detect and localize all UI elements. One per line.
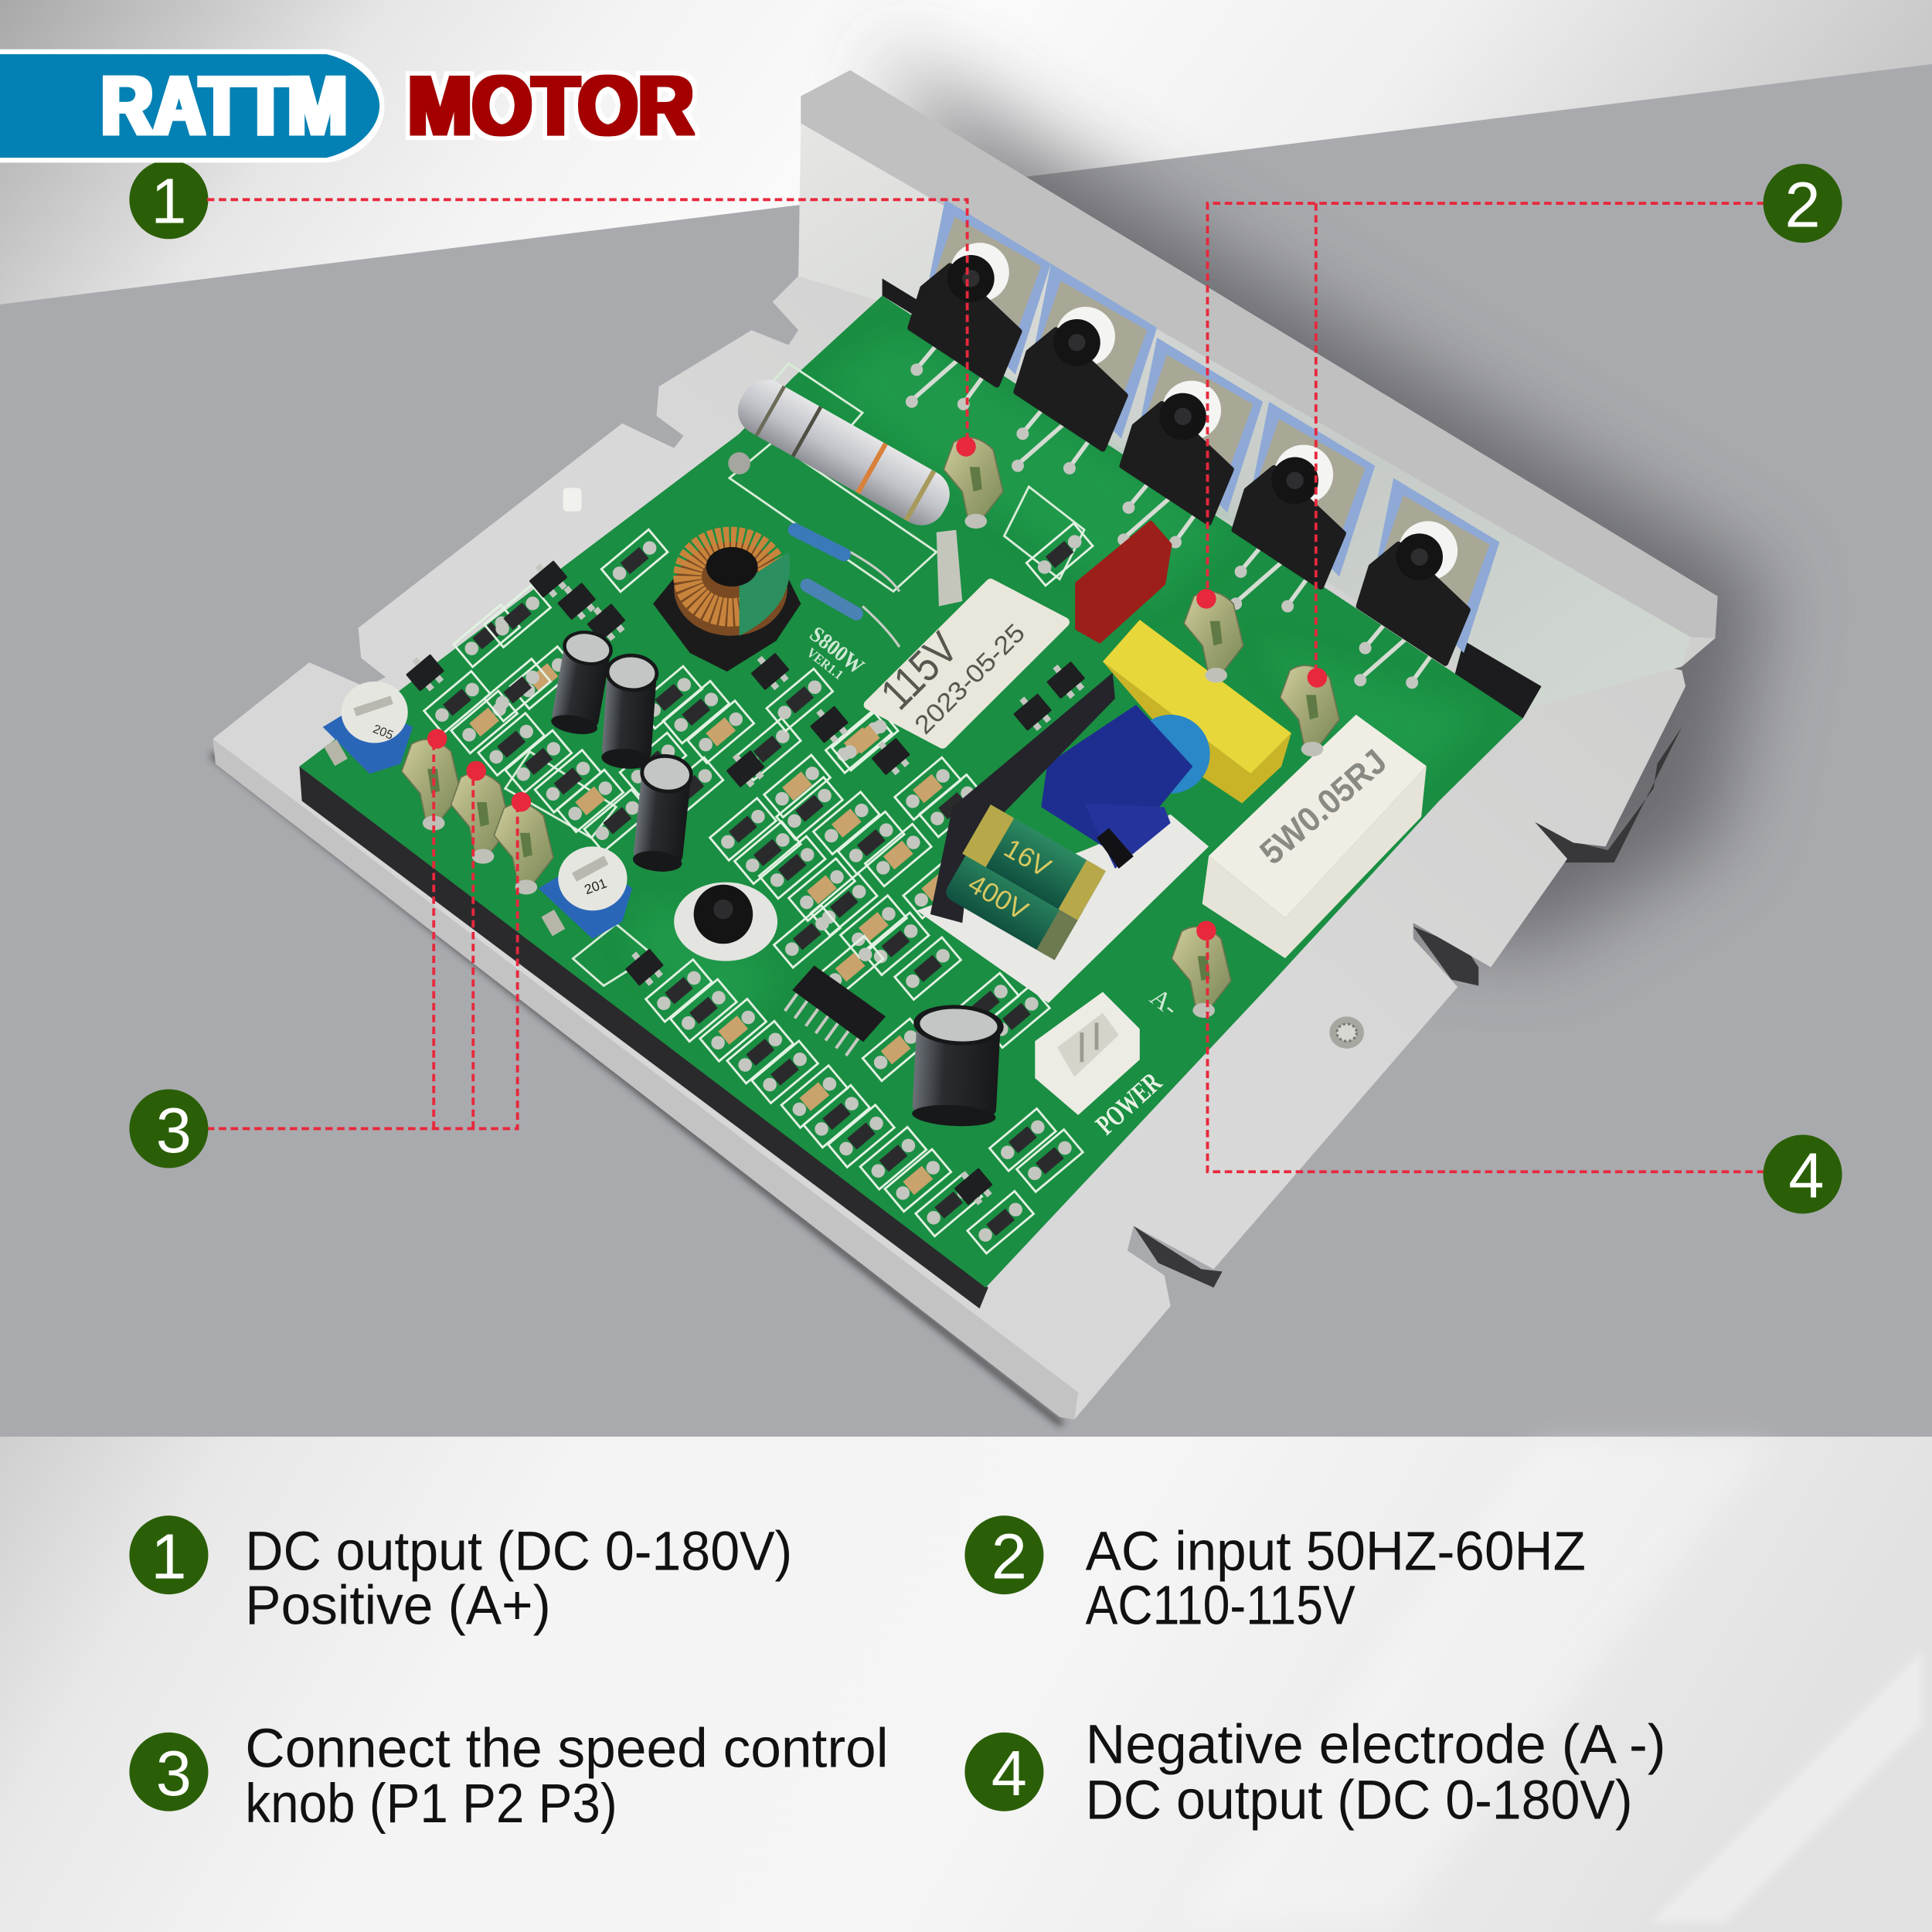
silkscreen POWER: POWER: [1090, 1066, 1168, 1141]
legend item 1: [129, 1515, 792, 1636]
green PCB: [299, 296, 1523, 1287]
legend item 3: 3: [156, 1737, 192, 1809]
white cement resistor: [1202, 715, 1427, 958]
badge 3: 3: [156, 1094, 192, 1166]
logo: RATTM blue banner: RATTM: [101, 59, 348, 152]
callout 3 lines and dots: [207, 729, 531, 1128]
SOIC chip: [785, 965, 886, 1056]
silkscreen A-: A-: [1145, 983, 1184, 1022]
voltage label sticker: 115V: [872, 623, 968, 719]
spade terminals: [402, 437, 1339, 1018]
yellow X2 capacitor: [1103, 620, 1291, 804]
green electrolytic capacitors: 400V: [963, 869, 1033, 927]
badge 1: [129, 160, 208, 239]
legend item 3: Connect the speed control: [245, 1717, 889, 1779]
trimmer pot 205: 205: [371, 723, 395, 743]
legend item 1: DC output (DC 0-180V): [245, 1520, 792, 1582]
left plate shadow: [212, 754, 1062, 1424]
bracket wall: [798, 123, 1691, 709]
black electrolytic capacitors: [549, 629, 1002, 1128]
plate front edge: [213, 739, 1078, 1420]
legend item 3: knob (P1 P2 P3): [245, 1773, 617, 1835]
legend item 4: 4: [992, 1737, 1027, 1809]
trimmer pot 205: [323, 682, 413, 774]
trimmer pot 201: 201: [582, 875, 609, 897]
background: bottom legend panel: [0, 1437, 1932, 1932]
badge 3: [129, 1089, 208, 1168]
logo: RATTM blue banner: [0, 49, 384, 162]
PCB side edge: [299, 767, 988, 1308]
vertical black daughter board: [930, 673, 1115, 923]
badge 2: 2: [1785, 168, 1821, 240]
silkscreen board name: VER1.1: [804, 645, 846, 682]
green electrolytic capacitors: 16V: [999, 833, 1056, 883]
power transistors with screws: [906, 199, 1499, 689]
white silkscreen zone: [917, 815, 1209, 1003]
badge 4: 4: [1788, 1140, 1824, 1212]
plate shadow: [879, 49, 1767, 949]
badge 1: 1: [151, 165, 186, 237]
component footprints: resistors and capacitors: [424, 523, 1093, 1253]
legend item 3: [129, 1717, 889, 1835]
product photo: motor driver board: [212, 49, 1767, 1424]
background: top light band: [0, 0, 1932, 304]
callout 1 line and dot: [207, 199, 976, 457]
blue transformer block: [1041, 705, 1210, 869]
green electrolytic capacitors: [943, 804, 1106, 960]
power resistor, banded: [728, 371, 962, 606]
notch shadows: [1134, 727, 1682, 1287]
small plate hole: [563, 488, 582, 512]
lighter copper zones: [628, 332, 1478, 1035]
silkscreen outlines: [505, 363, 1084, 986]
bracket top lip: [801, 70, 1718, 638]
aluminium heatsink plate: [213, 70, 1718, 1420]
mounting bolt: [674, 883, 777, 961]
voltage label sticker: [869, 583, 1065, 743]
legend item 4: DC output (DC 0-180V): [1086, 1769, 1633, 1831]
legend item 2: [964, 1515, 1586, 1636]
red film capacitor: [1077, 522, 1170, 641]
trimmer pot 201: [539, 846, 632, 939]
legend item 2: AC110-115V: [1086, 1574, 1355, 1636]
white POWER connector: [1035, 992, 1140, 1115]
callout 2 lines and dots: [1196, 203, 1764, 688]
logo: MOTOR wordmark: MOTOR: [408, 59, 694, 152]
silkscreen board name: S800W: [805, 622, 869, 679]
legend item 2: AC input 50HZ-60HZ: [1086, 1520, 1586, 1582]
legend item 2: 2: [992, 1520, 1027, 1592]
badge 2: [1764, 164, 1842, 243]
badge 4: [1764, 1134, 1842, 1213]
legend item 1: Positive (A+): [245, 1574, 551, 1636]
legend item 4: [964, 1714, 1666, 1831]
callout 4 line and dot: [1196, 921, 1764, 1172]
toroid inductor: [653, 541, 801, 672]
legend item 4: Negative electrode (A -): [1086, 1714, 1666, 1776]
black thermal strips: [883, 278, 1542, 719]
white cement resistor: 5W0.05RJ: [1253, 743, 1394, 872]
voltage label sticker: 2023-05-25: [910, 619, 1031, 740]
blue axial resistors: [794, 530, 900, 647]
legend item 1: 1: [151, 1520, 186, 1592]
small black transistors: [402, 556, 1089, 1210]
screw hole: [1329, 1016, 1364, 1049]
